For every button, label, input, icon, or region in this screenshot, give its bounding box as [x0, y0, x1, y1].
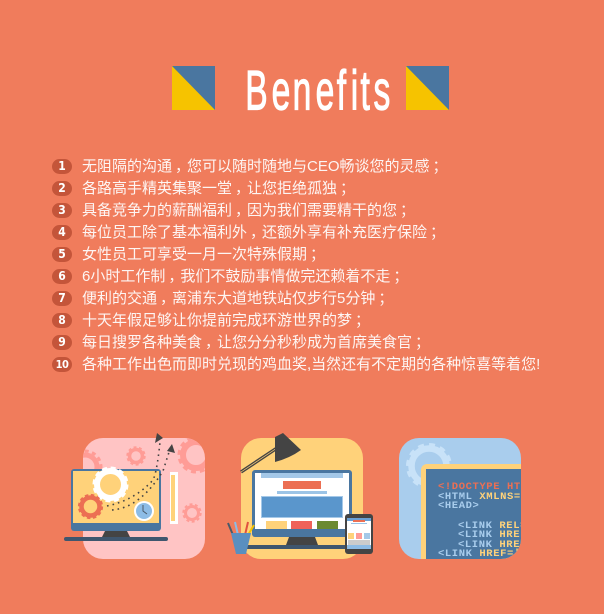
item 6: 6: [58, 269, 66, 283]
card: [83, 438, 205, 559]
title: Benefits: [245, 59, 390, 122]
code text: <LINK HREF: [458, 539, 527, 551]
icon: right square: [406, 66, 449, 110]
icon: code window: [399, 438, 521, 559]
code text: [438, 482, 521, 556]
item 9: 每日搜罗各种美食，让您分分秒秒成为首席美食官；: [82, 334, 430, 351]
item 8: 十天年假足够让你提前完成环游世界的梦；: [82, 312, 370, 329]
card: [241, 438, 363, 559]
clock: [134, 501, 154, 521]
header: title with flags: [172, 59, 449, 122]
code text: <HEAD>: [438, 500, 479, 512]
item 7: 便利的交通，离浦东大道地铁站仅步行5分钟；: [82, 290, 393, 307]
dotted arrows: [107, 442, 170, 510]
desk lamp: [241, 448, 277, 472]
item 2: 各路高手精英集聚一堂，让您拒绝孤独；: [82, 180, 355, 197]
icon: settings monitor: [64, 433, 213, 559]
monitor: [71, 469, 161, 531]
item 10: 各种工作出色而即时兑现的鸡血奖,当然还有不定期的各种惊喜等着您!: [82, 356, 540, 373]
ruler: [170, 472, 178, 524]
icon: left square: [172, 66, 215, 110]
pink gears: [83, 438, 205, 523]
item 4: 每位员工除了基本福利外，还额外享有补充医疗保险；: [82, 224, 445, 241]
item 2: 2: [58, 181, 66, 195]
item 10: 10: [56, 358, 68, 371]
item 3: 3: [58, 203, 66, 217]
item 9: 9: [58, 335, 66, 349]
stand and base: [102, 531, 130, 537]
icon: responsive web: [228, 433, 373, 559]
item 7: 7: [58, 291, 66, 305]
pencil cup: [228, 522, 254, 535]
code text: <LINK HREF: [458, 529, 527, 541]
gears on screen: [79, 468, 127, 518]
phone: [345, 514, 373, 554]
benefits list: [52, 158, 540, 373]
item 8: 8: [58, 313, 66, 327]
item 5: 女性员工可享受一月一次特殊假期；: [82, 246, 325, 263]
pale gear: [408, 444, 450, 488]
item 3: 具备竞争力的薪酬福利，因为我们需要精干的您；: [82, 202, 415, 219]
code text: <LINK REL=: [458, 520, 527, 532]
monitor: [252, 470, 352, 537]
item 5: 5: [58, 247, 66, 261]
code text: <!DOCTYPE HTML: [438, 481, 535, 493]
icons row: [64, 433, 521, 559]
item 1: 1: [58, 159, 66, 173]
code text: <HTML XMLNS=: [438, 491, 521, 503]
item 6: 6小时工作制，我们不鼓励事情做完还赖着不走；: [82, 268, 408, 285]
code panel: [421, 464, 521, 559]
item 1: 无阻隔的沟通，您可以随时随地与CEO畅谈您的灵感；: [82, 158, 448, 175]
code text: <LINK HREF='H: [438, 548, 528, 560]
item 4: 4: [58, 225, 66, 239]
stand and base: [286, 537, 318, 545]
card: [399, 438, 521, 559]
